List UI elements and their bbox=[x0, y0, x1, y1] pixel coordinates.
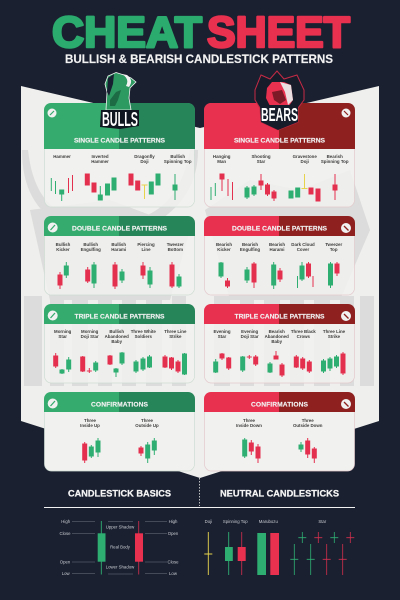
neutral candlesticks diagram: Spinning Top bbox=[223, 519, 248, 524]
panel: bullish double candle patterns: Engulfing bbox=[81, 247, 101, 252]
panel: bearish double candle patterns: Top bbox=[330, 247, 338, 252]
panel: bullish single candle patterns: Spinning Top bbox=[164, 159, 192, 164]
panel: bearish double candle patterns: DOUBLE CANDLE PATTERNS bbox=[232, 226, 328, 233]
panel: bearish double candle patterns: Bearish bbox=[216, 242, 232, 247]
logo: bears: BEARS bbox=[261, 105, 298, 125]
panel: bearish double candle patterns: Tweezer bbox=[325, 242, 342, 247]
panel: bearish triple candle patterns: Doji Star bbox=[241, 334, 259, 339]
panel: bearish confirmations: Three bbox=[243, 418, 256, 423]
panel: bearish single candle patterns bbox=[204, 103, 355, 207]
panel: bullish double candle patterns: Bullish bbox=[56, 242, 71, 247]
title bbox=[52, 8, 350, 57]
panel: bearish triple candle patterns: TRIPLE CANDLE PATTERNS bbox=[234, 314, 325, 321]
panel: bullish double candle patterns: Tweezer bbox=[167, 242, 184, 247]
panel: bearish triple candle patterns: Evening bbox=[213, 329, 231, 334]
panel: bullish double candle patterns: DOUBLE CANDLE PATTERNS bbox=[72, 226, 168, 233]
heading: candlestick basics: CANDLESTICK BASICS bbox=[68, 488, 171, 498]
panel: bullish triple candle patterns: Three Line bbox=[164, 329, 187, 334]
panel: bullish single candle patterns: Dragonfly bbox=[134, 154, 155, 159]
panel: bullish triple candle patterns: Soldiers bbox=[135, 334, 153, 339]
panel: bearish triple candle patterns: Baby bbox=[271, 339, 283, 344]
panel: bullish double candle patterns: Bullish bbox=[111, 242, 126, 247]
subtitle: BULLISH & BEARISH CANDLESTICK PATTERNS bbox=[65, 54, 333, 66]
candlestick basics diagram: Lower Shadow bbox=[106, 564, 135, 570]
panel: bullish triple candle patterns bbox=[44, 304, 195, 383]
panel: bullish triple candle patterns: Three White bbox=[131, 329, 156, 334]
panel: bearish double candle patterns: Cover bbox=[297, 247, 310, 252]
panel: bearish double candle patterns bbox=[204, 216, 355, 295]
panel: bearish single candle patterns: Man bbox=[217, 159, 226, 164]
panel: bullish confirmations: Inside Up bbox=[80, 423, 100, 428]
panel: bearish triple candle patterns: Three Line bbox=[323, 329, 346, 334]
panel: bearish double candle patterns: Dark Cloud bbox=[291, 242, 315, 247]
panel: bearish confirmations: Inside Down bbox=[236, 423, 262, 428]
panel: bearish confirmations: Outside Down bbox=[293, 423, 323, 428]
panel: bullish confirmations: Three bbox=[84, 418, 97, 423]
heading: neutral candlesticks: NEUTRAL CANDLESTICKS bbox=[220, 488, 339, 498]
panel: bullish single candle patterns bbox=[44, 103, 195, 207]
light backdrop panel bbox=[21, 86, 379, 478]
candlestick basics diagram: High bbox=[169, 519, 178, 524]
neutral candlesticks diagram: Star bbox=[318, 519, 327, 524]
neutral candlesticks diagram: Marubozu bbox=[259, 519, 278, 524]
panel: bullish double candle patterns: Piercing bbox=[137, 242, 155, 247]
panel: bullish triple candle patterns: Bullish bbox=[109, 329, 124, 334]
panel: bullish double candle patterns: Harami bbox=[111, 247, 126, 252]
panel: bearish double candle patterns: Harami bbox=[270, 247, 284, 252]
candlestick basics diagram: High bbox=[61, 519, 71, 524]
logo: bulls: BULLS bbox=[102, 109, 138, 131]
panel: bullish confirmations bbox=[44, 392, 195, 471]
panel: bullish triple candle patterns: Morning bbox=[81, 329, 99, 334]
candlestick basics diagram: Upper Shadow bbox=[106, 524, 135, 530]
panel: bullish single candle patterns: Hammer bbox=[91, 159, 109, 164]
panel: bearish single candle patterns: Spinning Top bbox=[321, 159, 349, 164]
panel: bearish single candle patterns: Doji bbox=[301, 159, 309, 164]
candlestick basics diagram: Real Body bbox=[110, 544, 131, 550]
panel: bearish triple candle patterns: Star bbox=[218, 334, 227, 339]
panel: bullish double candle patterns: Bottom bbox=[168, 247, 183, 252]
logo: bulls bbox=[100, 72, 139, 131]
panel: bullish triple candle patterns: Morning bbox=[54, 329, 72, 334]
panel: bullish confirmations: CONFIRMATIONS bbox=[91, 401, 149, 408]
panel: bearish triple candle patterns: Bearish bbox=[269, 329, 285, 334]
panel: bullish triple candle patterns: Baby bbox=[111, 339, 123, 344]
panel: bearish confirmations bbox=[204, 392, 355, 471]
panel: bullish single candle patterns: SINGLE CANDLE PATTERNS bbox=[74, 138, 166, 144]
panel: bullish triple candle patterns: Abandoned bbox=[105, 334, 129, 339]
candlestick basics diagram: Low bbox=[62, 571, 71, 576]
panel: bearish double candle patterns: Bearish bbox=[242, 242, 258, 247]
panel: bullish double candle patterns: Bullish bbox=[83, 242, 98, 247]
candlestick basics diagram: Open bbox=[168, 531, 179, 536]
panel: bullish triple candle patterns: Doji Star bbox=[81, 334, 99, 339]
panel: bullish triple candle patterns: TRIPLE CANDLE PATTERNS bbox=[74, 314, 165, 321]
panel: bearish single candle patterns: Star bbox=[257, 159, 266, 164]
watermark: faded bull and bear logos bbox=[22, 150, 374, 386]
neutral candlesticks diagram: Doji bbox=[205, 519, 212, 524]
panel: bearish single candle patterns: SINGLE CANDLE PATTERNS bbox=[234, 138, 326, 144]
candlestick basics diagram: Open bbox=[60, 560, 71, 564]
panel: bearish triple candle patterns: Evening bbox=[241, 329, 259, 334]
panel: bullish triple candle patterns: Strike bbox=[169, 334, 182, 339]
panel: bearish single candle patterns: Hanging bbox=[213, 154, 231, 159]
panel: bullish single candle patterns: Doji bbox=[140, 159, 149, 164]
panel: bearish triple candle patterns bbox=[204, 304, 355, 383]
panel: bullish confirmations: Three bbox=[141, 418, 154, 423]
logo: bears bbox=[255, 71, 304, 130]
panel: bullish single candle patterns: Hammer bbox=[53, 154, 71, 159]
candlestick basics diagram: Close bbox=[168, 560, 179, 564]
panel: bearish double candle patterns: Engulfing bbox=[240, 247, 260, 252]
panel: bearish single candle patterns: Bearish bbox=[327, 154, 343, 159]
panel: bullish triple candle patterns: Star bbox=[58, 334, 67, 339]
panel: bearish triple candle patterns: Strike bbox=[328, 334, 341, 339]
panel: bearish double candle patterns: Bearish bbox=[269, 242, 285, 247]
panel: bullish double candle patterns bbox=[44, 216, 195, 295]
panel: bearish triple candle patterns: Crows bbox=[297, 334, 311, 339]
candlestick basics diagram: Close bbox=[60, 531, 71, 536]
candlestick basics diagram bbox=[60, 519, 179, 576]
panel: bearish confirmations: CONFIRMATIONS bbox=[251, 401, 309, 408]
panel: bullish single candle patterns: Bullish bbox=[170, 154, 185, 159]
panel: bearish double candle patterns: Kicker bbox=[217, 247, 231, 252]
panel: bearish single candle patterns: Gravestone bbox=[293, 154, 317, 159]
panel: bearish triple candle patterns: Abandoned bbox=[265, 334, 289, 339]
panel: bearish single candle patterns: Shooting bbox=[251, 154, 271, 159]
panel: bullish single candle patterns: Inverted bbox=[91, 154, 109, 159]
neutral candlesticks diagram bbox=[204, 519, 354, 575]
panel: bullish double candle patterns: Kicker bbox=[56, 247, 70, 252]
candlestick basics diagram: Low bbox=[169, 571, 178, 576]
panel: bullish confirmations: Outside Up bbox=[135, 423, 159, 428]
title: CHEAT bbox=[52, 8, 202, 57]
panel: bullish double candle patterns: Line bbox=[141, 247, 151, 252]
panel: bearish confirmations: Three bbox=[302, 418, 314, 423]
panel: bearish triple candle patterns: Three Black bbox=[291, 329, 316, 334]
title: SHEET bbox=[207, 8, 350, 57]
